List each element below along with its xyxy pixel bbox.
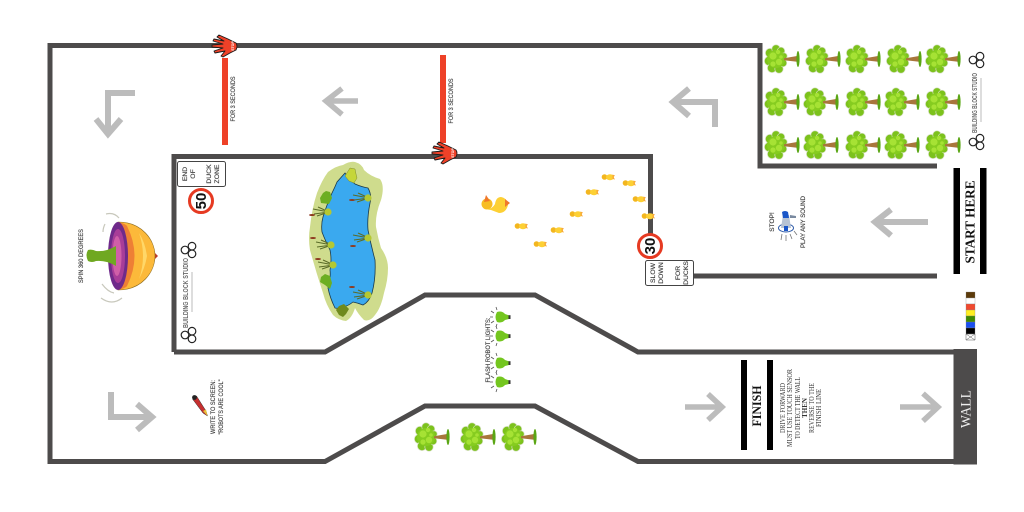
pencil [192,395,208,416]
bulbs [490,307,510,392]
finish instructions: FINISH LINE [815,389,823,427]
pond [309,162,388,321]
finish instructions: THEN [801,398,809,418]
arrow: top corner [673,88,715,127]
logo: duck zone: BUILDING BLOCK STUDIO [181,258,190,328]
arrow: top left corner [96,93,135,134]
speed sign 50: 50 [193,193,210,209]
stop marker: second red line [432,55,457,164]
speed sign 30 [638,234,694,286]
finish line [741,360,773,450]
speed sign 30: FOR [675,266,682,280]
megaphone [778,211,797,241]
speed sign 50: DUCK [206,164,213,184]
speed sign 50: ZONE [214,164,221,183]
speed sign 30: SLOW [650,262,657,283]
finish instructions: TO DETECT THE WALL [794,377,802,439]
label: flash lights: FLASH ROBOT LIGHTS: [485,317,492,382]
finish instructions: DRIVE FORWARD [779,383,787,433]
label: stop and sound: STOP! [769,212,776,232]
label: write to screen: "ROBOTS ARE COOL" [218,379,225,434]
colour palette [966,292,975,340]
big duck [482,195,510,213]
logo: top right: BUILDING BLOCK STUDIO [970,73,979,133]
arrow: bottom left corner [111,392,152,430]
stop marker: first red line: FOR 3 SECONDS [230,76,237,122]
speed sign 30: DOWN [658,262,665,284]
wall block: WALL [958,390,974,428]
speed sign 50: END [182,167,189,181]
start line [954,168,986,274]
wall block [954,349,977,464]
label: write to screen [210,379,225,434]
ducklings [515,174,655,247]
stop marker: first red line [212,35,237,145]
speed sign 50: OF [190,169,197,179]
logo: top right [969,52,984,150]
finish line: FINISH [749,386,764,426]
spinning top [86,214,158,302]
label: stop and sound [769,196,807,248]
stop marker: second red line: FOR 3 SECONDS [448,78,455,124]
label: write to screen: WRITE TO SCREEN: [210,380,217,434]
speed sign 30: DUCKS [683,261,690,285]
arrow: start [875,210,928,236]
trees: lower bend [414,423,537,451]
speed sign 50 [178,162,226,212]
finish instructions: MUST USE TOUCH SENSOR [786,369,794,447]
finish instructions: REVERSE TO THE [808,383,816,433]
arrow: before finish [685,394,722,420]
label: spin: SPIN 360 DEGREES [78,228,85,283]
start line: START HERE [962,180,978,264]
logo: duck zone [181,242,196,343]
track walls [50,46,954,462]
speed sign 30: 30 [642,238,659,254]
finish instructions [779,369,823,447]
trees: top right grove [764,45,961,159]
arrow: top straight [326,88,358,114]
arrow: to wall [900,394,938,421]
label: stop and sound: PLAY ANY SOUND [800,196,807,248]
